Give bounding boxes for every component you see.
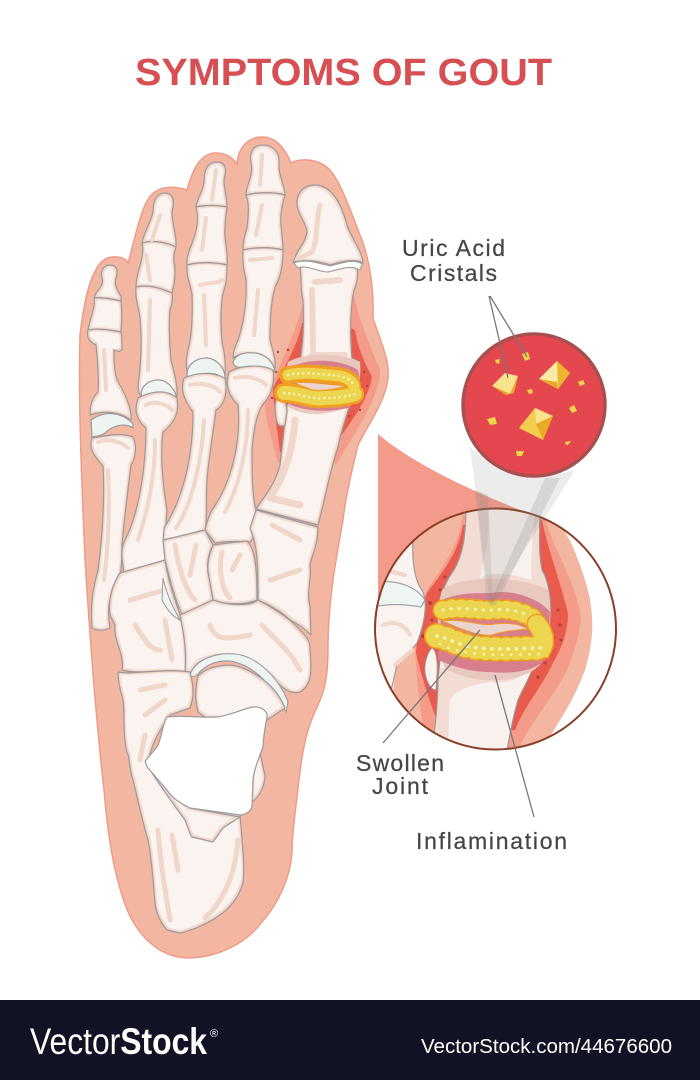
small crystals: [487, 352, 585, 456]
calcaneus: [118, 671, 244, 933]
upper bone: [438, 505, 551, 615]
leader lines: uric acid: [489, 296, 527, 378]
navicular: [180, 600, 311, 693]
white talus block: [145, 707, 267, 815]
calcaneus wedge: [152, 773, 240, 842]
navicular cartilage arc: [190, 654, 288, 712]
crystal B: [539, 361, 570, 389]
magnified red layer: [416, 520, 568, 740]
magnified skin layer: [393, 500, 592, 755]
upper crystal band: [443, 608, 537, 622]
joint dark pink ring: [438, 592, 550, 673]
calcaneus shading: [140, 685, 238, 920]
intermediate cuneiform: [208, 541, 257, 604]
big toe proximal phalanx: [290, 265, 360, 387]
joint pink zone: [285, 354, 360, 414]
lower crystal band: [437, 624, 544, 655]
second toe group bones: [122, 193, 178, 573]
crystal A: [492, 373, 518, 395]
cuboid: [109, 560, 187, 672]
left neighbour bone: [376, 542, 426, 689]
red tissue dots: [421, 575, 562, 679]
grey light cones: [470, 447, 575, 605]
crystal circle: [463, 334, 605, 476]
title: SYMPTOMS OF GOUT: [135, 52, 552, 94]
magnified salmon layer: [415, 510, 581, 755]
label: swollen joint: Swollen: [356, 750, 444, 776]
third toe group bones: [163, 162, 227, 542]
label: inflamination: Inflamination: [416, 828, 567, 854]
skeleton: [87, 145, 363, 933]
magnifier white base: [375, 508, 616, 750]
leader line: swollen joint: [383, 630, 480, 743]
red circle: [463, 334, 605, 476]
joint crack: [295, 382, 347, 390]
big toe joint cartilage: [294, 261, 362, 272]
footer bar: [0, 1000, 700, 1080]
joint pink zone: [438, 579, 550, 680]
label: uric acid crystals: Cristals: [410, 260, 497, 286]
lower bone: [434, 660, 532, 748]
first metatarsal: [256, 405, 350, 525]
fourth toe group bones: [205, 145, 285, 543]
upper bone highlight: [480, 505, 535, 580]
foot skin outline: [79, 137, 388, 958]
left bone shading: [383, 570, 412, 665]
uric acid deposits: [284, 373, 355, 398]
red tissue dots: [271, 349, 368, 417]
magnifier ring: [375, 508, 616, 750]
footer url: VectorStock.com/44676600: [421, 1036, 672, 1058]
zoom cone triangle: [378, 434, 525, 600]
inflamed tissue, red layer: [273, 320, 372, 452]
label: uric acid crystals: [402, 235, 505, 286]
label: uric acid crystals: Uric Acid: [402, 235, 505, 261]
crack highlight: [442, 620, 528, 635]
tarsal shading: [130, 525, 300, 670]
sesamoid nub: [425, 648, 437, 690]
small cartilage slit: [162, 578, 180, 620]
foot illustration: [79, 137, 388, 958]
talus right nub: [252, 745, 265, 802]
lateral cuneiform: [163, 530, 213, 614]
big toe distal phalanx: [293, 185, 363, 265]
label: swollen joint: Joint: [372, 773, 429, 799]
left cartilage: [378, 582, 425, 607]
leader line: inflammation: [495, 675, 534, 817]
joint dark pink ring: [284, 361, 360, 411]
footer logo: VectorStock: [30, 1021, 207, 1062]
talus neck: [196, 665, 285, 720]
inflamed tissue, salmon layer: [265, 290, 380, 470]
medial cuneiform: [250, 510, 318, 635]
little toe bones: [87, 265, 135, 630]
magnified joint: [370, 500, 616, 755]
crystal C: [519, 408, 553, 440]
footer registered mark: ®: [210, 1028, 218, 1040]
label: swollen joint: [356, 750, 444, 799]
small sesamoid nub: [275, 398, 287, 426]
lower bone shading: [435, 668, 520, 738]
